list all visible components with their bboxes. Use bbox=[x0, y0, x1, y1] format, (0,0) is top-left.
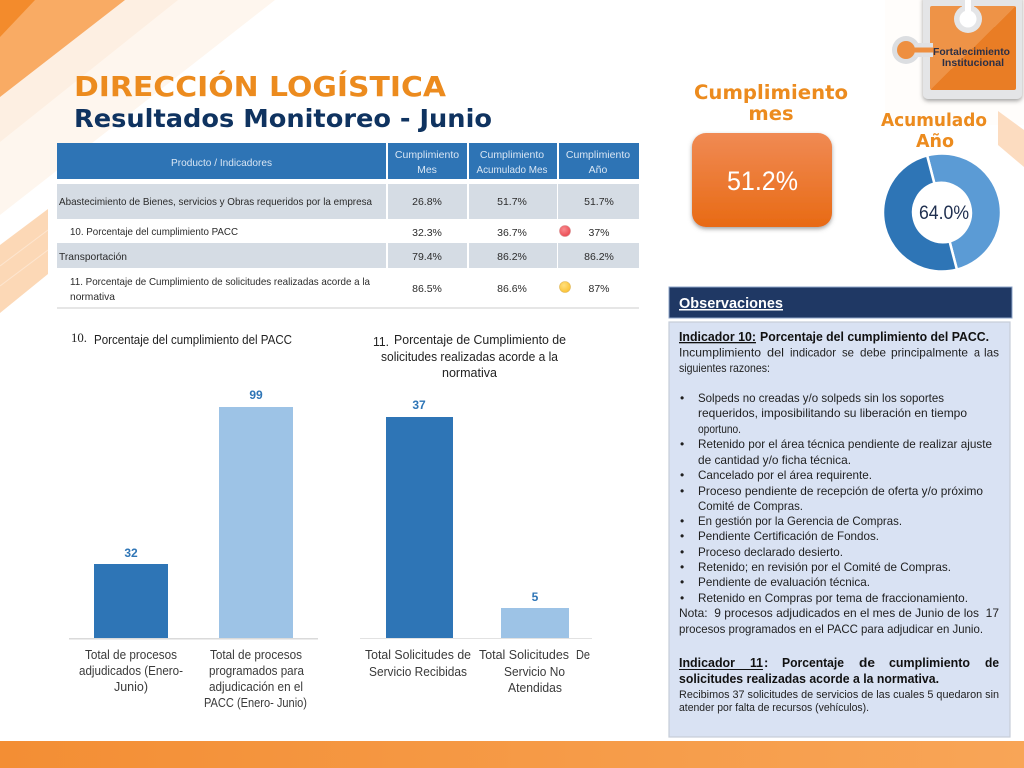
row: indicador 11: normativa bbox=[70, 291, 115, 303]
nota: Nota: 9 procesos adjudicados en el mes de Junio de los 17 bbox=[679, 606, 999, 620]
row: indicador 10 bbox=[70, 226, 610, 239]
bar: programados bbox=[219, 388, 293, 638]
bar: programados: 99 bbox=[249, 388, 263, 402]
axis label: recibidas: Total Solicitudes de bbox=[365, 648, 471, 662]
axis label: adjudicados: Total de procesos bbox=[85, 648, 177, 662]
list of reasons: • bbox=[680, 484, 684, 498]
chart title: Porcentaje de Cumplimiento de bbox=[394, 333, 566, 347]
subtitle: Resultados Monitoreo - Junio bbox=[74, 104, 492, 133]
list of reasons: Comité de Compras. bbox=[698, 499, 803, 513]
row: Transportación: 79.4% bbox=[412, 251, 442, 263]
table header: Producto / Indicadores bbox=[171, 157, 272, 169]
list of reasons: Proceso declarado desierto. bbox=[698, 545, 843, 559]
indicador 10 text: Porcentaje del cumplimiento del PACC. bbox=[760, 329, 989, 344]
table header: Cumplimiento bbox=[480, 149, 544, 161]
bar chart: indicador 11 bbox=[360, 333, 592, 695]
table header: Cumplimiento bbox=[566, 149, 630, 161]
list of reasons: • bbox=[680, 391, 684, 405]
axis label: no atendidas: Atendidas bbox=[508, 681, 562, 695]
chart title: solicitudes realizadas acorde a la bbox=[381, 350, 558, 364]
indicador 10 text: a bbox=[974, 346, 980, 360]
list of reasons: • bbox=[680, 437, 684, 451]
axis label: recibidas bbox=[365, 648, 471, 679]
row: indicador 11: 11. Porcentaje de Cumplimiento de solicitudes realizadas acorde a la bbox=[70, 276, 370, 288]
title: DIRECCIÓN LOGÍSTICA bbox=[74, 69, 446, 103]
list of reasons: Cancelado por el área requirente. bbox=[698, 468, 872, 482]
list of reasons: Retenido; en revisión por el Comité de Compras. bbox=[698, 560, 951, 574]
nota: procesos programados en el PACC para adjudicar en Junio. bbox=[679, 622, 983, 636]
row: indicador 11: 86.6% bbox=[497, 283, 527, 295]
axis label: adjudicados: Junio) bbox=[114, 680, 148, 694]
KPI box: 51.2% bbox=[692, 133, 832, 227]
observaciones header bbox=[669, 287, 1012, 318]
row: Abastecimiento: 51.7% bbox=[584, 196, 614, 208]
bar: no atendidas: 5 bbox=[532, 590, 539, 604]
axis label: no atendidas: Servicio No bbox=[504, 665, 565, 679]
axis label: programados: PACC (Enero- Junio) bbox=[204, 696, 307, 710]
chart title: Porcentaje del cumplimiento del PACC bbox=[94, 333, 292, 347]
indicador 10 text: siguientes razones: bbox=[679, 361, 770, 375]
indicador 10 text: se bbox=[842, 346, 854, 360]
list of reasons: • bbox=[680, 468, 684, 482]
chart title: 10. bbox=[71, 331, 87, 345]
indicador 10 text: debe bbox=[860, 346, 886, 360]
chart title: normativa bbox=[442, 366, 497, 380]
bar: adjudicados bbox=[94, 546, 168, 638]
chart title bbox=[373, 333, 566, 380]
axis label: programados bbox=[204, 648, 307, 710]
row: indicador 11: 87% bbox=[588, 283, 610, 295]
table header: Acumulado Mes bbox=[476, 164, 548, 176]
observaciones panel bbox=[669, 322, 1010, 737]
bar: recibidas bbox=[386, 398, 453, 638]
indicador 11 text: Recibimos 37 solicitudes de servicios de las cuales 5 quedaron sin bbox=[679, 689, 999, 701]
indicador 11 text: : bbox=[764, 655, 768, 670]
indicador 11 text bbox=[679, 655, 999, 714]
indicador 11 text: Porcentaje bbox=[782, 655, 844, 670]
row: Abastecimiento bbox=[57, 184, 639, 219]
row: indicador 11: 86.5% bbox=[412, 283, 442, 295]
axis label: programados: Total de procesos bbox=[210, 648, 302, 662]
KPI box: 51.2%: 51.2% bbox=[727, 166, 798, 196]
indicador 11 text: solicitudes realizadas acorde a la normativa. bbox=[679, 671, 939, 686]
list of reasons: • bbox=[680, 575, 684, 589]
row: Abastecimiento: 26.8% bbox=[412, 196, 442, 208]
indicators table bbox=[57, 143, 639, 309]
indicador 11 text: cumplimiento bbox=[889, 655, 970, 670]
list of reasons: Proceso pendiente de recepción de oferta y/o próximo bbox=[698, 484, 983, 498]
axis label: programados: programados para bbox=[209, 664, 304, 678]
axis label: programados: adjudicación en el bbox=[209, 680, 303, 694]
axis label: no atendidas: De bbox=[576, 648, 590, 662]
chart title: 11. bbox=[373, 335, 389, 349]
row: indicador 10: 32.3% bbox=[412, 227, 442, 239]
indicador 10 text: indicador bbox=[790, 346, 836, 360]
table header: Año bbox=[589, 164, 607, 176]
observaciones header: Observaciones bbox=[679, 295, 783, 312]
list of reasons: Retenido por el área técnica pendiente de realizar ajuste bbox=[698, 437, 992, 451]
table header: Cumplimiento bbox=[395, 149, 459, 161]
background: top-left diagonal decoration bbox=[0, 0, 275, 215]
indicador 11 text: 11 bbox=[750, 655, 763, 670]
heading: acumulado año bbox=[881, 111, 987, 152]
axis label: adjudicados: adjudicados (Enero- bbox=[79, 664, 183, 678]
bottom orange band bbox=[0, 741, 1024, 768]
heading: acumulado año: Año bbox=[916, 132, 954, 152]
heading: acumulado año: Acumulado bbox=[881, 111, 987, 131]
nota bbox=[679, 606, 999, 636]
indicador 11 text: Indicador bbox=[679, 655, 735, 670]
list of reasons: En gestión por la Gerencia de Compras. bbox=[698, 514, 902, 528]
background: right side decoration bbox=[885, 0, 1024, 167]
list of reasons: de cantidad y/o ficha técnica. bbox=[698, 453, 851, 467]
axis label: no atendidas: Total Solicitudes bbox=[479, 648, 569, 662]
list of reasons bbox=[680, 391, 992, 605]
heading: cumplimiento mes: mes bbox=[748, 102, 794, 125]
list of reasons: • bbox=[680, 529, 684, 543]
row: indicador 11 bbox=[57, 276, 639, 309]
list of reasons: • bbox=[680, 591, 684, 605]
indicador 10 text: Incumplimiento bbox=[679, 346, 761, 360]
bar chart: indicador 10 bbox=[69, 331, 318, 710]
donut chart: 64.0% bbox=[883, 153, 1001, 272]
row: indicador 10: 10. Porcentaje del cumplimiento PACC bbox=[70, 226, 238, 238]
axis label: no atendidas bbox=[479, 648, 590, 695]
axis label: recibidas: Servicio Recibidas bbox=[369, 665, 467, 679]
list of reasons: requeridos, imposibilitando su liberación en tiempo bbox=[698, 406, 967, 420]
logo: puzzle piece: Fortalecimiento bbox=[933, 46, 1010, 58]
row: Transportación bbox=[57, 243, 639, 268]
row: indicador 10: 37% bbox=[588, 227, 610, 239]
heading: cumplimiento mes bbox=[694, 81, 848, 125]
row: Transportación: 86.2% bbox=[584, 251, 614, 263]
row: Transportación: 86.2% bbox=[497, 251, 527, 263]
table header bbox=[57, 143, 639, 179]
list of reasons: Pendiente de evaluación técnica. bbox=[698, 575, 870, 589]
indicador 10 text: Indicador 10: bbox=[679, 329, 756, 344]
background: left diagonal decoration bbox=[0, 209, 48, 313]
donut chart: 64.0%: 64.0% bbox=[919, 203, 969, 224]
indicador 10 text bbox=[679, 329, 999, 375]
bar: recibidas: 37 bbox=[412, 398, 426, 412]
axis label: adjudicados bbox=[79, 648, 183, 694]
table header: Mes bbox=[417, 164, 437, 176]
heading: cumplimiento mes: Cumplimiento bbox=[694, 81, 848, 104]
row: Abastecimiento: Abastecimiento de Bienes, servicios y Obras requeridos por la empresa bbox=[59, 196, 372, 208]
list of reasons: oportuno. bbox=[698, 422, 741, 436]
logo: puzzle piece: Institucional bbox=[942, 57, 1004, 69]
row: indicador 10: 36.7% bbox=[497, 227, 527, 239]
list of reasons: Retenido en Compras por tema de fraccionamiento. bbox=[698, 591, 968, 605]
list of reasons: Solpeds no creadas y/o solpeds sin los soportes bbox=[698, 391, 944, 405]
indicador 10 text: del bbox=[767, 346, 784, 360]
logo: puzzle piece bbox=[892, 0, 1022, 99]
row: Abastecimiento: 51.7% bbox=[497, 196, 527, 208]
list of reasons: • bbox=[680, 514, 684, 528]
indicador 10 text: las bbox=[984, 346, 999, 360]
indicador 11 text: de bbox=[859, 655, 875, 670]
row: Transportación: Transportación bbox=[59, 251, 127, 263]
indicador 11 text: atender por falta de recursos (vehículos). bbox=[679, 702, 869, 714]
list of reasons: • bbox=[680, 560, 684, 574]
indicador 11 text: de bbox=[985, 655, 999, 670]
list of reasons: • bbox=[680, 545, 684, 559]
bar: no atendidas bbox=[501, 590, 569, 638]
indicador 10 text: principalmente bbox=[891, 346, 968, 360]
list of reasons: Pendiente Certificación de Fondos. bbox=[698, 529, 879, 543]
bar: adjudicados: 32 bbox=[124, 546, 138, 560]
